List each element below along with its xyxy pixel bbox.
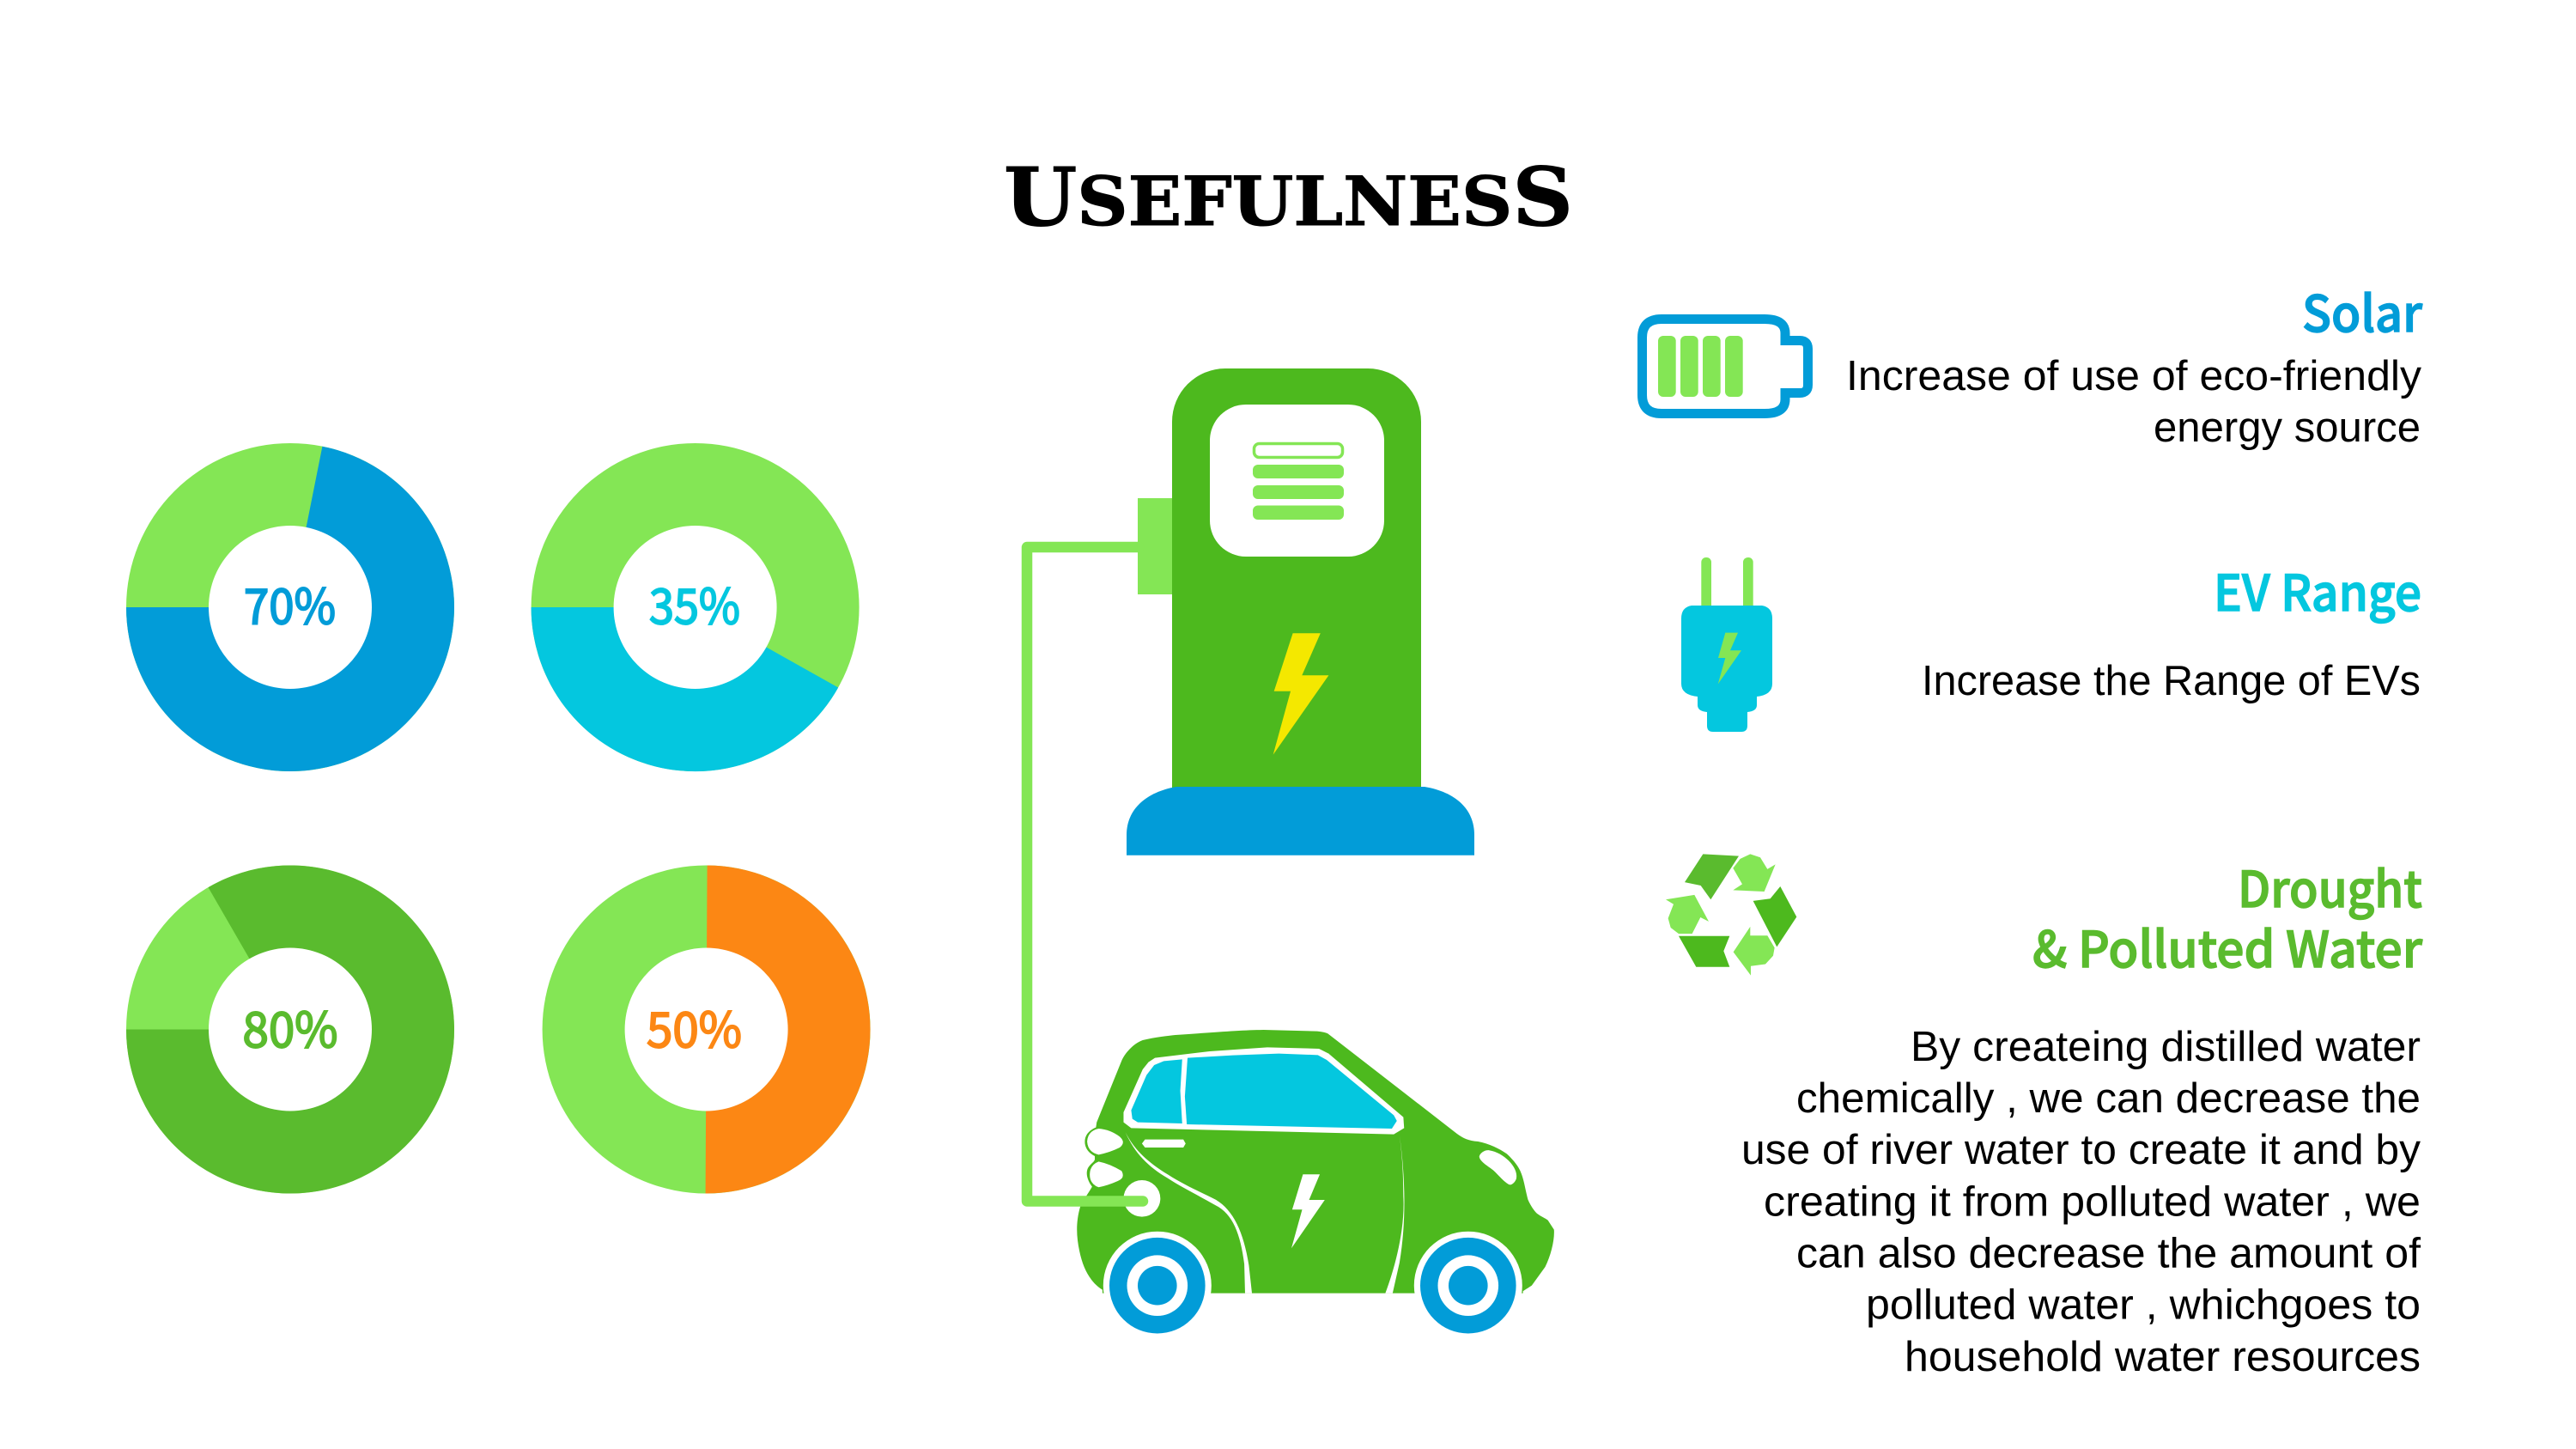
icon: recycle: [1666, 854, 1796, 976]
icon: yellow lightning bolt: [1273, 633, 1328, 755]
rear wheel: [1103, 1232, 1212, 1340]
white bolt: [1291, 1174, 1325, 1248]
station body: [1172, 368, 1421, 792]
text block: solar: [1846, 274, 2422, 451]
tail light bottom: [1090, 1161, 1123, 1187]
door handle: [1142, 1140, 1186, 1148]
front wheel: [1414, 1232, 1522, 1340]
screen bars: [1253, 443, 1344, 520]
text block: solar: Solar: [2302, 274, 2422, 346]
door line front: [1385, 1135, 1404, 1294]
icon: charging station: [1127, 368, 1474, 855]
charging port: [1123, 1180, 1160, 1217]
tail light top: [1087, 1129, 1123, 1154]
text block: drought and polluted water: By createing distilled water: [1911, 1024, 2421, 1070]
station screen: [1210, 405, 1384, 557]
donut chart: 35%: [532, 443, 860, 771]
text block: solar: energy source: [2154, 405, 2421, 451]
donut chart: 70%: 70%: [244, 569, 336, 639]
text block: drought and polluted water: can also decrease the amount of: [1796, 1230, 2421, 1276]
text block: drought and polluted water: Drought: [2238, 849, 2422, 922]
text block: EV range: EV Range: [2214, 553, 2421, 625]
side window rear: [1131, 1059, 1182, 1123]
text block: drought and polluted water: & Polluted Water: [2032, 910, 2422, 982]
title: USEFULNESS: [1004, 150, 1573, 245]
icon: electric car: [1077, 1030, 1554, 1340]
side window front: [1185, 1054, 1397, 1129]
icon: battery: [1642, 320, 1808, 414]
donut chart: 35%: 35%: [649, 569, 740, 639]
donut chart: 80%: [126, 866, 454, 1194]
charging cable: [1027, 547, 1143, 1201]
donut chart: 70%: [126, 443, 454, 771]
donut chart: 80%: 80%: [242, 991, 338, 1062]
icon: plug: [1681, 557, 1772, 732]
donut chart: 50%: [543, 866, 871, 1194]
text block: drought and polluted water: chemically , we can decrease the: [1796, 1075, 2421, 1122]
text block: EV range: Increase the Range of EVs: [1922, 658, 2421, 704]
text block: EV range: [1922, 553, 2421, 704]
text block: drought and polluted water: use of river water to create it and by: [1741, 1127, 2421, 1173]
donut chart: 50%: 50%: [647, 991, 742, 1062]
text block: solar: Increase of use of eco-friendly: [1846, 353, 2422, 399]
text block: drought and polluted water: [1741, 849, 2422, 1380]
text block: drought and polluted water: polluted water , whichgoes to: [1866, 1282, 2421, 1328]
station base: [1127, 787, 1474, 855]
door line rear: [1126, 1132, 1252, 1294]
panel: donut charts: [126, 443, 871, 1194]
station connector: [1138, 498, 1173, 594]
text block: drought and polluted water: household water resources: [1905, 1334, 2421, 1380]
window frame: [1123, 1047, 1404, 1135]
head light: [1479, 1150, 1516, 1184]
text block: drought and polluted water: creating it from polluted water , we: [1764, 1178, 2421, 1225]
car body and details: [1077, 1030, 1554, 1294]
